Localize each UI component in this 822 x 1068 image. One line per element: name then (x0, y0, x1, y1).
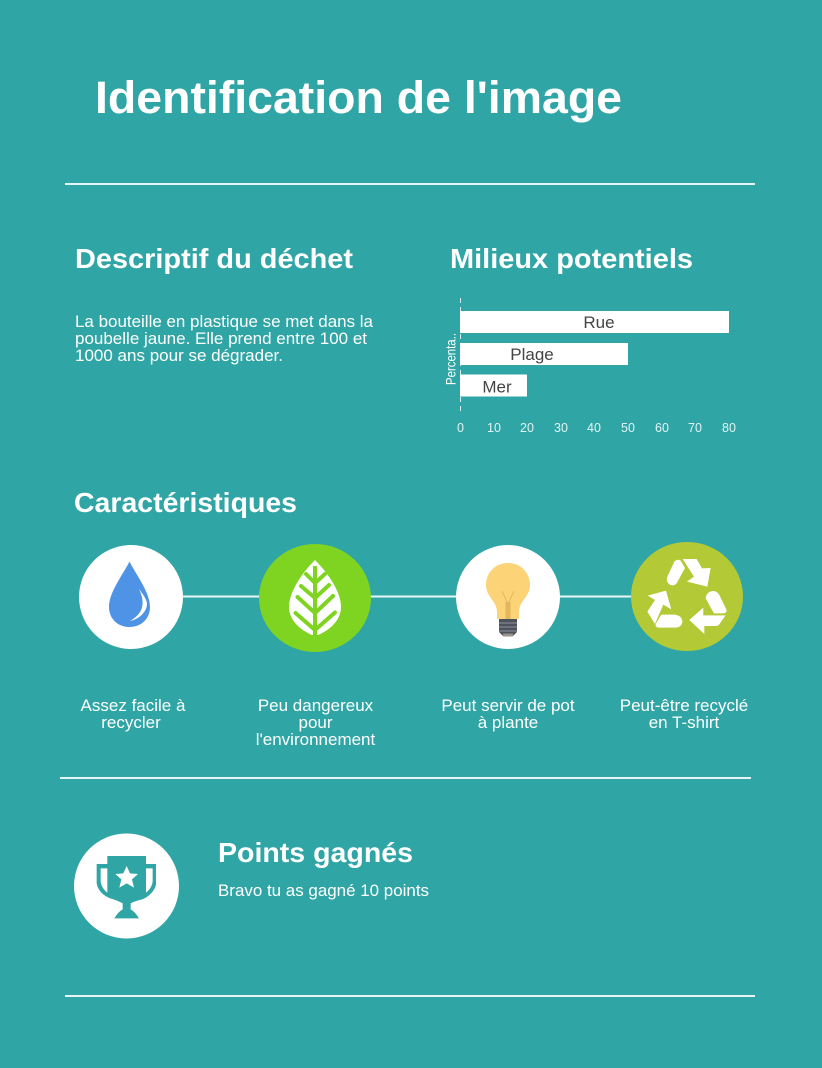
label: assez facile à recycler (81, 696, 186, 732)
text block: description: La bouteille en plastique se met dans la (75, 312, 374, 331)
x axis ticks: 0 (457, 421, 464, 435)
x axis ticks: 40 (587, 421, 601, 435)
heading: descriptif du déchet: Descriptif du déchet (75, 243, 353, 274)
label: peut-être recyclé en T-shirt: en T-shirt (649, 713, 720, 732)
text block: description (75, 312, 374, 365)
icon: recycling (631, 542, 743, 651)
label: peut servir de pot à plante: à plante (478, 713, 538, 732)
label: peu dangereux pour l'environnement (256, 696, 376, 749)
x axis ticks: 30 (554, 421, 568, 435)
heading: caractéristiques: Caractéristiques (74, 487, 297, 518)
label: assez facile à recycler: recycler (101, 713, 161, 732)
label: peut servir de pot à plante (441, 696, 575, 732)
icon: water drop (79, 545, 183, 649)
bar: Rue: Rue (583, 313, 615, 332)
x axis ticks: 80 (722, 421, 736, 435)
text block: description: 1000 ans pour se dégrader. (75, 346, 283, 365)
label: peu dangereux pour l'environnement: l'environnement (256, 730, 376, 749)
bar: Plage (460, 343, 628, 365)
x axis ticks: 50 (621, 421, 635, 435)
x axis ticks (457, 421, 736, 435)
bar: Rue (460, 311, 729, 333)
bar: Plage: Plage (510, 345, 554, 364)
bar chart: milieux potentiels (442, 298, 736, 435)
text block: points: Bravo tu as gagné 10 points (218, 881, 429, 900)
heading: milieux potentiels: Milieux potentiels (450, 243, 693, 274)
title: Identification de l'image (95, 72, 622, 123)
label: peut-être recyclé en T-shirt: Peut-être recyclé (620, 696, 748, 715)
icon: trophy (74, 834, 179, 938)
icon: light bulb (456, 545, 560, 649)
x axis ticks: 60 (655, 421, 669, 435)
bar: Mer: Mer (482, 378, 512, 396)
label: peu dangereux pour l'environnement: Peu dangereux (258, 696, 374, 715)
x axis ticks: 10 (487, 421, 501, 435)
label: peu dangereux pour l'environnement: pour (298, 713, 333, 732)
label: peut servir de pot à plante: Peut servir de pot (441, 696, 575, 715)
label: peut-être recyclé en T-shirt (620, 696, 748, 732)
x axis ticks: 20 (520, 421, 534, 435)
y axis label: Percenta.. (442, 333, 458, 385)
heading: points gagnés: Points gagnés (218, 837, 413, 868)
x axis ticks: 70 (688, 421, 702, 435)
bar: Mer (460, 374, 527, 396)
icon: leaf (259, 544, 371, 652)
text block: description: poubelle jaune. Elle prend entre 100 et (75, 329, 367, 348)
label: assez facile à recycler: Assez facile à (81, 696, 186, 715)
